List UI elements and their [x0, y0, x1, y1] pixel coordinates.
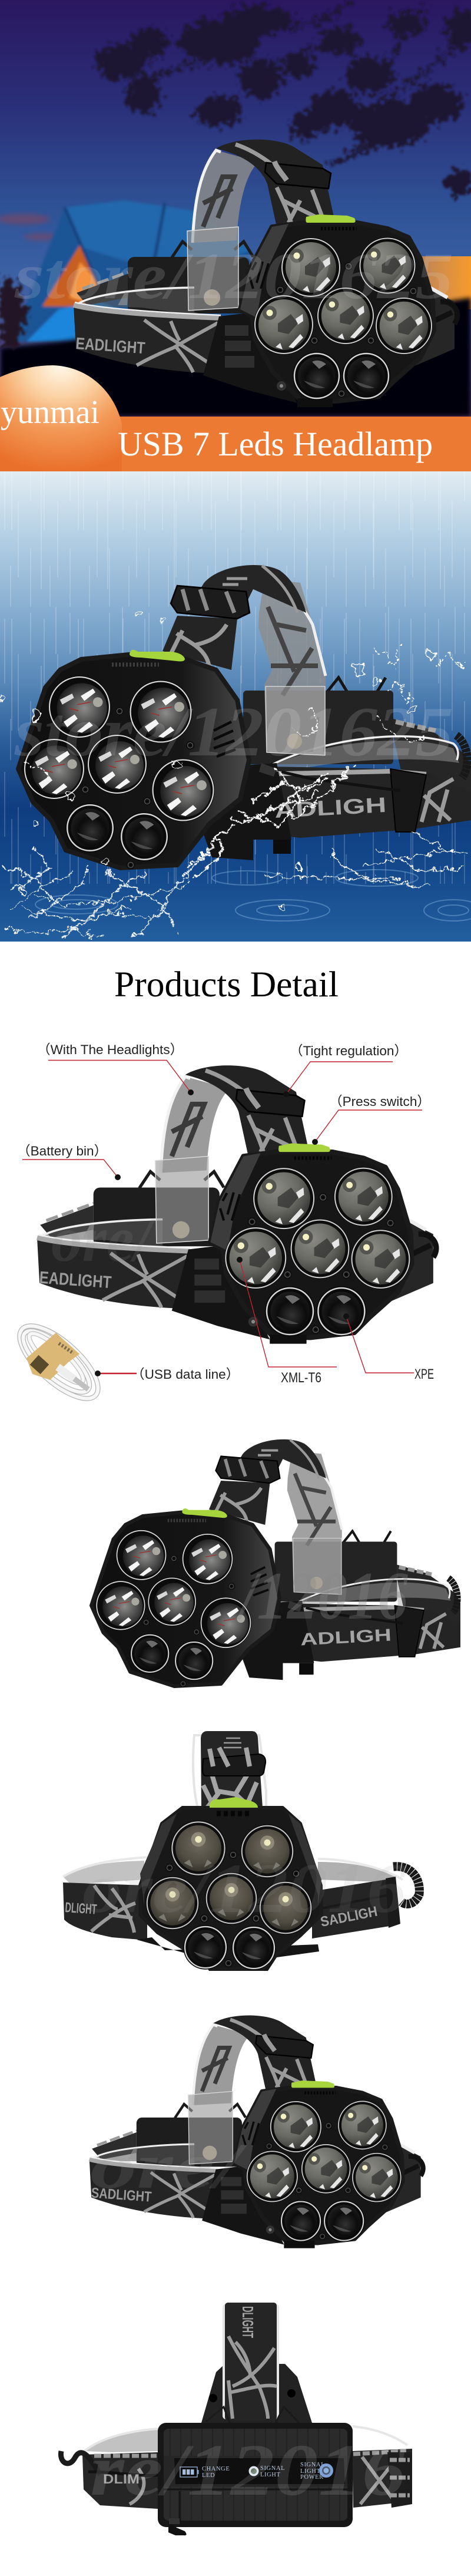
strap lettering, right: SADLIGH: [319, 1904, 379, 1930]
label: signal light power: POWER: [300, 2474, 324, 2481]
watermark: /12016: [237, 1558, 408, 1633]
illustration: tent: [11, 200, 250, 342]
illustration: headlamp: SADLIGHT: [91, 2185, 152, 2205]
banner: orange title strip: [0, 417, 471, 471]
icon: signal light: [248, 2466, 259, 2476]
background: heavy rain streaks: [0, 471, 471, 884]
strap lettering, left: DLIGHT: [65, 1900, 98, 1918]
background: rain streaks: [0, 471, 471, 884]
callout: With The Headlights: （With The Headlights）: [37, 1042, 183, 1057]
background: rain and water gradient: [0, 471, 471, 942]
background: dusk sky: [0, 0, 471, 417]
photo: headlamp, rear battery view: [61, 2303, 412, 2535]
hero panel: camping scene with headlamp: [0, 0, 471, 471]
strap lettering: ADLIGH: [274, 792, 387, 823]
icon: battery level: [180, 2467, 199, 2477]
background: pink clouds: [0, 214, 59, 240]
watermark: store/1201625: [14, 240, 453, 313]
badge: brand circle: [0, 365, 122, 471]
strap lettering, left: DLIM: [103, 2472, 140, 2486]
product title: USB 7 Leds Headlamp: [118, 425, 433, 463]
illustration: headlamp: ADLIGH: [300, 1625, 392, 1650]
horizontal strap: [63, 1857, 419, 1940]
callout: XML-T6: [237, 1257, 337, 1386]
illustration: annotated headlamp: EADLIGHT: [39, 1269, 112, 1292]
watermark: re/12016: [90, 2430, 406, 2511]
rain panel: waterproof headlamp scene: [0, 471, 471, 942]
icon: power button: [319, 2463, 333, 2478]
photo: headlamp, right three-quarter view: [89, 2015, 423, 2248]
vertical strap: [206, 2303, 299, 2423]
background: tree at left edge: [0, 277, 28, 348]
label: change LED: CHANGE: [202, 2466, 230, 2472]
background: orange horizon glow: [177, 256, 471, 309]
label: signal light power: SIGNAL: [300, 2462, 325, 2468]
label: signal light power: LIGHT: [300, 2468, 320, 2475]
background: dark treeline and ground: [0, 298, 471, 417]
background: pine tree foliage: [96, 0, 471, 197]
watermark: ore/12016: [82, 1849, 406, 1927]
lamp head: [137, 1797, 321, 1971]
callout: XPE: XPE: [414, 1366, 434, 1382]
callout: Battery bin: （Battery bin）: [17, 1144, 107, 1158]
label: signal light: SIGNAL: [260, 2465, 285, 2472]
label: signal light: LIGHT: [260, 2472, 280, 2478]
illustration: headlamp: [89, 2015, 423, 2248]
illustration: seven-LED headlamp, mirrored view: [18, 565, 471, 870]
photo: headlamp, front view: [63, 1731, 419, 1971]
illustration: seven-LED headlamp: [74, 140, 457, 407]
water splashes: [0, 610, 470, 937]
headband over the top: [193, 1731, 266, 1808]
illustration: headlamp: [91, 1439, 460, 1687]
label: signal light: [260, 2465, 285, 2478]
photo: headlamp, left three-quarter view: [91, 1439, 460, 1687]
callout: XML-T6: XML-T6: [281, 1370, 321, 1386]
watermark: store/1201625: [14, 692, 453, 771]
label: change LED: LED: [202, 2472, 215, 2479]
callout: Press switch: （Press switch）: [329, 1094, 430, 1109]
callout: With The Headlights: [37, 1042, 194, 1095]
battery box: [158, 2423, 353, 2535]
mounting bracket: [201, 2364, 312, 2423]
background: water ripples: [35, 870, 471, 921]
illustration: USB cable: [9, 1315, 109, 1410]
strap lettering: EADLIGHT: [75, 334, 145, 357]
callout: XPE: [343, 1313, 434, 1382]
callout: Battery bin: [17, 1144, 121, 1180]
products detail panel: annotated headlamp: [9, 965, 436, 1410]
watermark: ore/: [51, 1203, 156, 1275]
callout: Press switch: [312, 1094, 430, 1145]
side straps: [61, 2426, 412, 2509]
callout: Tight regulation: [283, 1043, 407, 1097]
callout: USB data line: （USB data line）: [131, 1367, 239, 1382]
label: change LED: [202, 2466, 230, 2479]
illustration: annotated headlamp: [37, 1065, 436, 1344]
label: signal light power: [300, 2462, 325, 2481]
strap lettering, top: DLIGHT: [239, 2306, 257, 2338]
brand name: yunmai: [1, 394, 99, 431]
heading: Products Detail: [114, 965, 339, 1005]
callout: Tight regulation: （Tight regulation）: [290, 1043, 407, 1058]
watermark: ore/: [90, 2130, 247, 2202]
